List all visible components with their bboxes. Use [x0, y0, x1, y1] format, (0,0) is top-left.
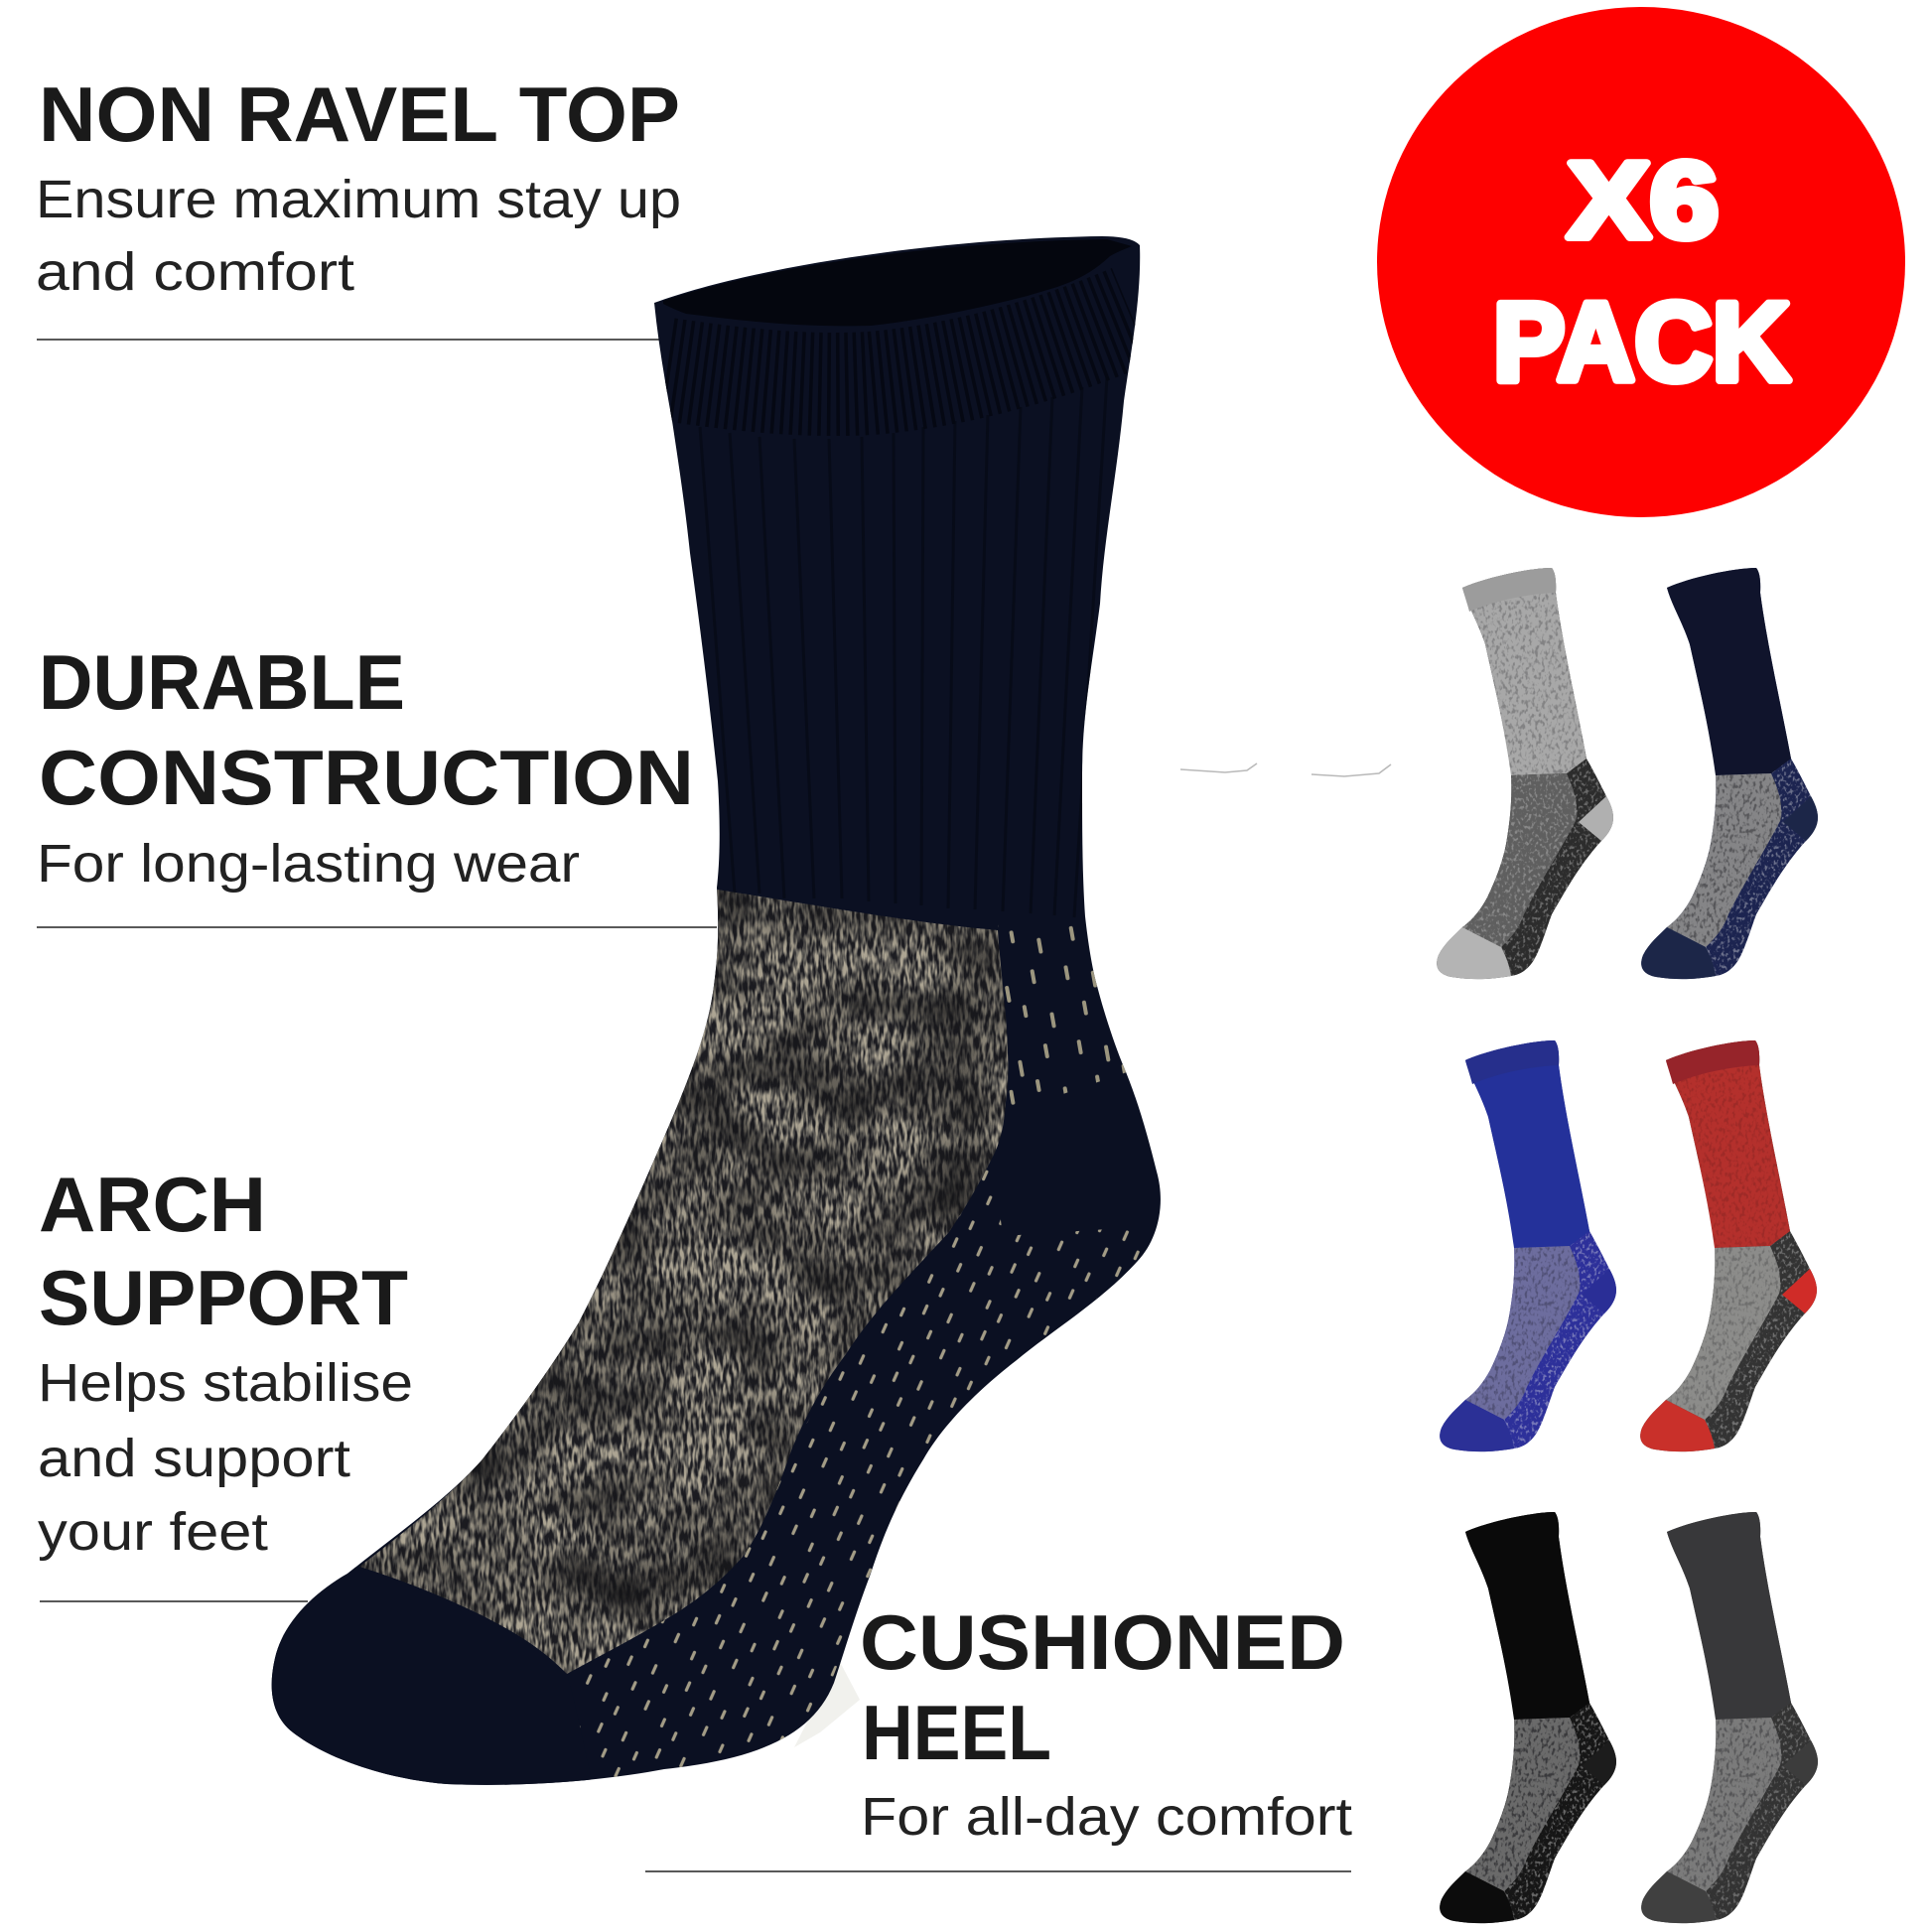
heading: DURABLE [39, 638, 405, 726]
heading block: durable construction [37, 638, 694, 894]
gray panel mottling [359, 890, 1008, 1674]
colour variants grid [1437, 568, 1818, 1923]
description: For long-lasting wear [37, 834, 580, 894]
description: Ensure maximum stay up [36, 170, 681, 229]
sock: charcoal [1641, 1512, 1818, 1923]
heading: NON RAVEL TOP [39, 70, 680, 158]
toe cap [272, 1567, 592, 1785]
red circle [1377, 7, 1905, 517]
heading block: non ravel top [36, 70, 681, 302]
badge text: X6 [1568, 140, 1719, 261]
cuff ribbing [667, 316, 1132, 384]
heading block: cushioned heel: HEEL [862, 1689, 1051, 1776]
heading: ARCH [39, 1161, 266, 1248]
description: Helps stabilise [38, 1353, 413, 1413]
sock: light gray [1437, 568, 1613, 979]
heading: CUSHIONED [860, 1598, 1345, 1686]
sock body [248, 228, 1181, 1807]
heading block: cushioned heel [860, 1598, 1352, 1847]
badge: x6 pack: PACK [1493, 280, 1790, 404]
heel shadow [794, 1660, 860, 1747]
heading block: arch support [38, 1161, 413, 1562]
stray white-gray marks [1180, 763, 1391, 776]
sock: red [1640, 1040, 1817, 1451]
lower sole dots [561, 1157, 1152, 1792]
heading block: durable construction: CONSTRUCTION [39, 734, 694, 821]
description: For all-day comfort [861, 1787, 1352, 1847]
upper sole dots [998, 918, 1127, 1112]
sock: black [1440, 1512, 1616, 1923]
main sock illustration [248, 228, 1181, 1807]
heading block: non ravel top: and comfort [36, 242, 354, 302]
badge: x6 pack [1377, 7, 1905, 517]
cuff opening [663, 239, 1132, 326]
heading block: arch support: your feet [38, 1502, 268, 1562]
heading block: arch support: SUPPORT [39, 1254, 408, 1341]
sock: navy [1641, 568, 1818, 979]
gray knit panel [359, 890, 1008, 1674]
sock: blue [1440, 1040, 1616, 1451]
leg ribs [700, 377, 1107, 917]
heading block: arch support: and support [38, 1429, 350, 1488]
